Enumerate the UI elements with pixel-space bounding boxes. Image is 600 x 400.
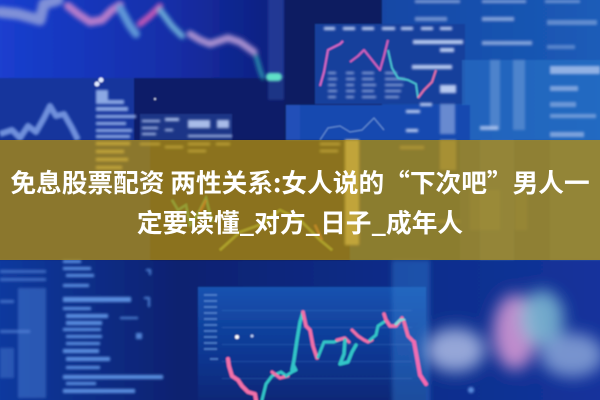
top-left blue screen bbox=[0, 0, 300, 140]
band underlay: dark central chart bbox=[0, 140, 600, 260]
bottom chart dots bbox=[235, 334, 254, 339]
bottom-right blurred glow chart bbox=[425, 290, 600, 377]
bottom screen bbox=[0, 260, 600, 400]
band underlay: candlesticks and stripes bbox=[172, 198, 332, 250]
small white dots bbox=[94, 78, 156, 100]
top-right table text bbox=[324, 0, 600, 137]
top-right mountain chart bbox=[320, 118, 384, 140]
top-right data screen bbox=[300, 0, 600, 140]
top-left green price marker bbox=[266, 73, 282, 81]
top-right pink and teal chart bbox=[320, 40, 436, 98]
bottom candlestick chart bbox=[228, 312, 426, 400]
title text on gold band: 免息股票配资 两性关系:女人说的“下次吧”男人一 bbox=[10, 163, 590, 200]
title text on gold band bbox=[10, 163, 590, 240]
top-left blurred candlestick line bbox=[0, 0, 263, 78]
left small line chart bbox=[0, 106, 78, 140]
mini table panel bbox=[140, 114, 232, 140]
title text on gold band: 定要读懂_对方_日子_成年人 bbox=[137, 203, 463, 240]
bottom-left blurred code text bbox=[0, 260, 163, 398]
left text column bbox=[96, 90, 136, 138]
bottom chart horizontal grid lines and axis labels bbox=[204, 294, 412, 379]
translucent gold band bbox=[0, 140, 600, 260]
